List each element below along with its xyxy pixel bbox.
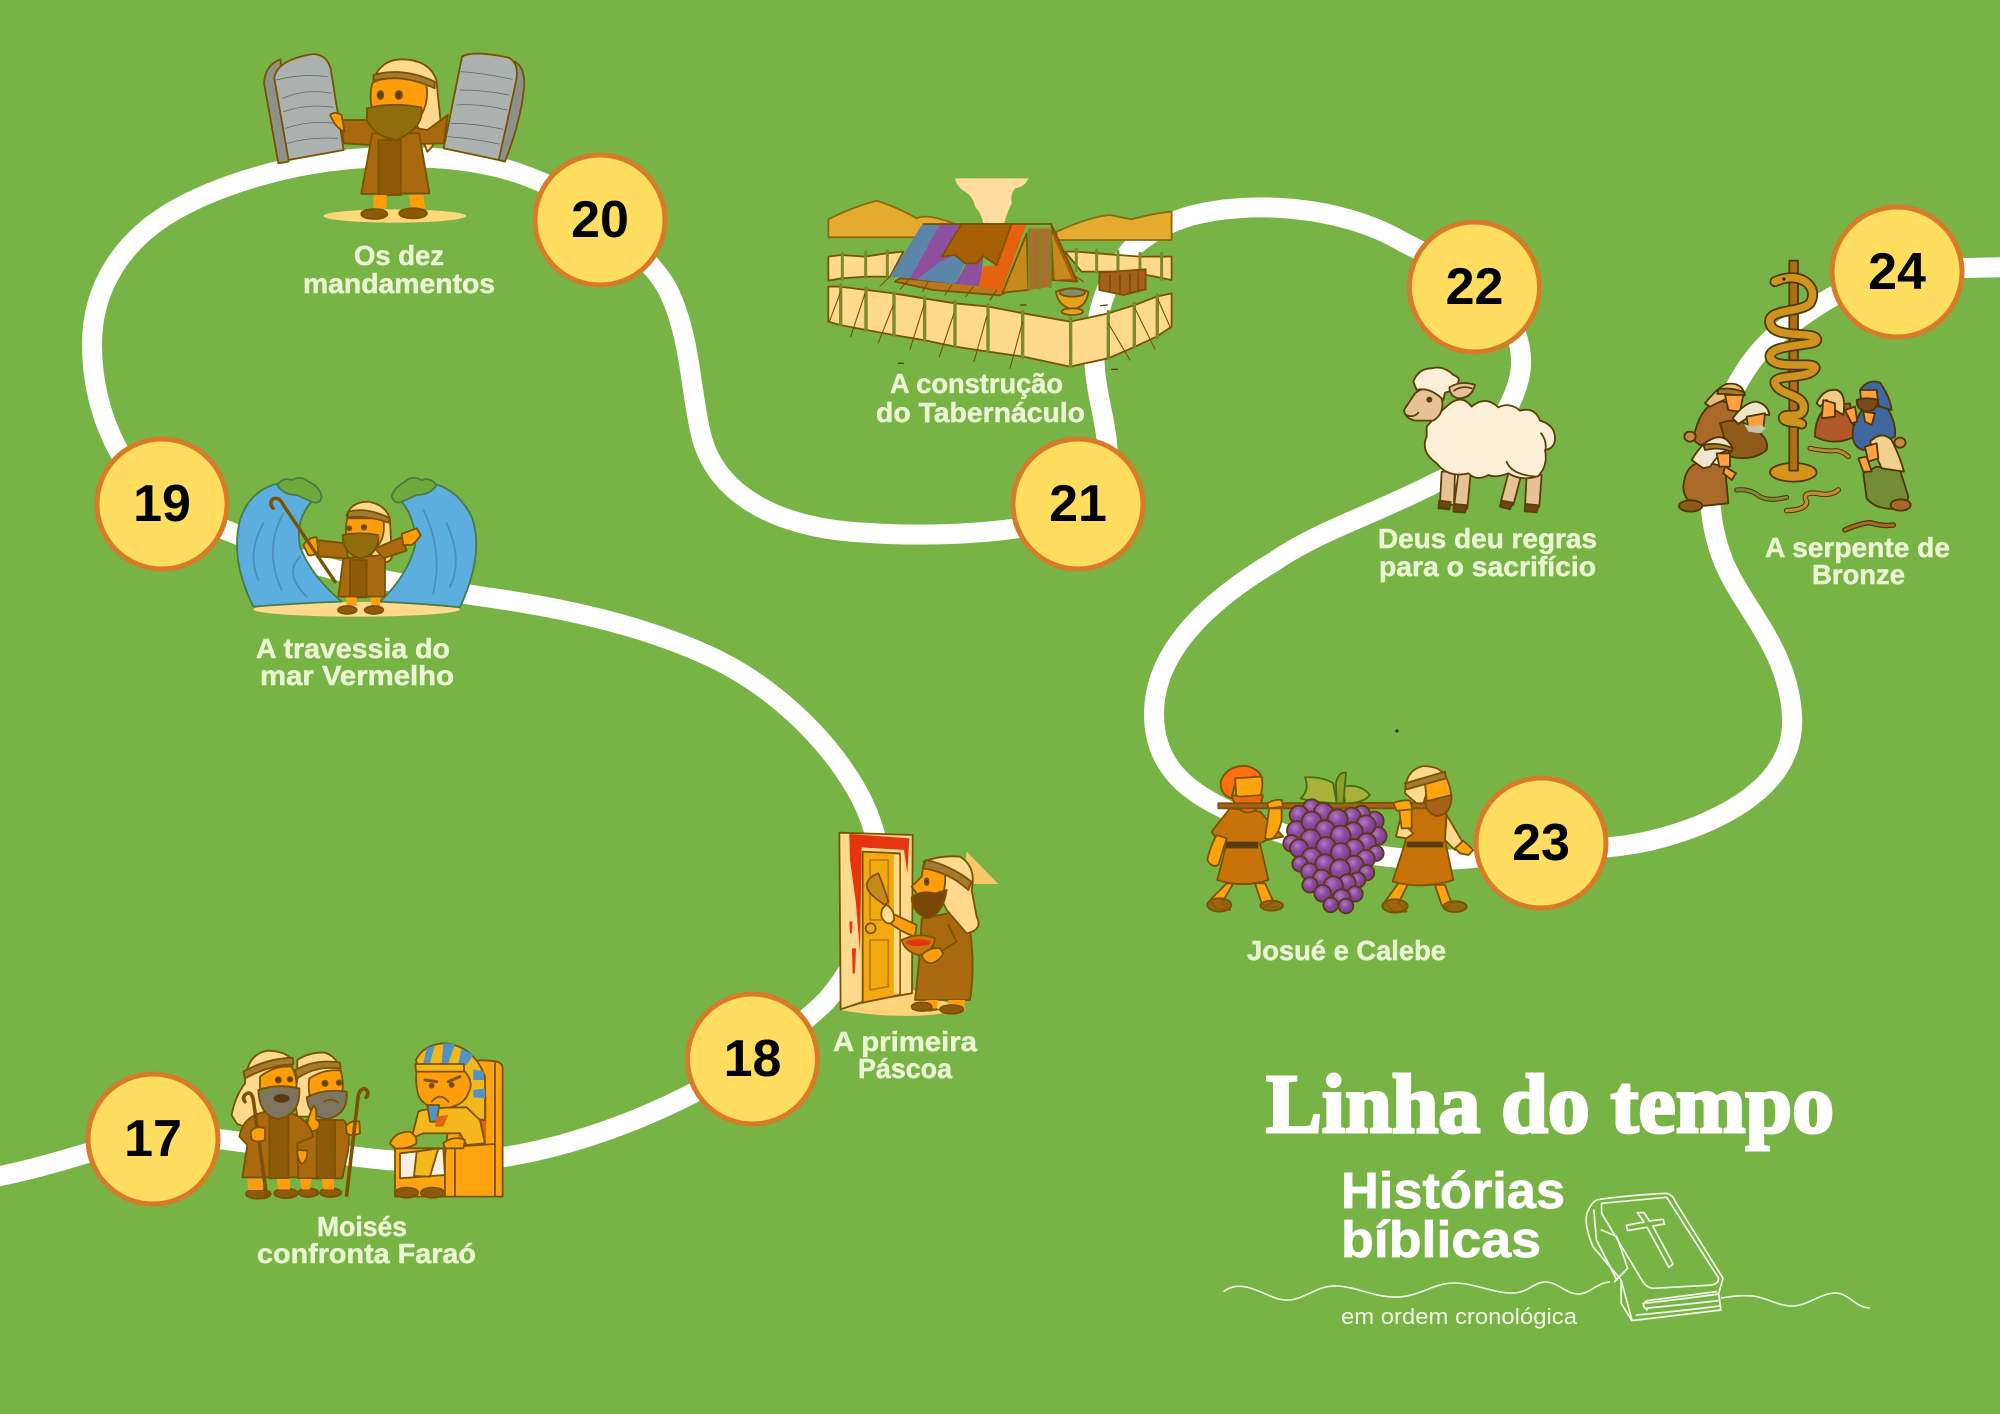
illustration: tabernacle and courtyard xyxy=(828,178,1172,369)
number 18 badge: 18 xyxy=(724,1030,781,1088)
label: Moisés xyxy=(317,1211,407,1242)
label: para o sacrifício xyxy=(1379,551,1596,582)
number 22 badge xyxy=(1410,222,1540,352)
caption: em ordem cronológica: em ordem cronológica xyxy=(1341,1304,1578,1329)
label: Os dez xyxy=(354,240,444,271)
number 20 badge: 20 xyxy=(571,191,629,249)
illustration: bronze serpent with praying people xyxy=(1679,261,1911,530)
number 21 badge xyxy=(1013,439,1143,569)
number 18 badge xyxy=(688,994,818,1124)
illustration: Moses parting the sea xyxy=(237,478,476,617)
scene: Deus deu regras para o sacrifício xyxy=(1378,222,1597,582)
number 20 badge xyxy=(535,155,665,285)
illustration: man marking the door with blood xyxy=(839,833,998,1016)
label: Páscoa xyxy=(858,1053,952,1084)
number 23 badge: 23 xyxy=(1512,814,1570,872)
title: Linha do tempo: Linha do tempo xyxy=(1266,1058,1834,1151)
label: mandamentos xyxy=(303,268,495,299)
label: Josué e Calebe xyxy=(1247,935,1446,966)
illustration: spies carrying the grapes xyxy=(1207,766,1473,913)
label: Deus deu regras xyxy=(1378,523,1597,554)
wavy line xyxy=(1224,1282,1870,1308)
number 24 badge: 24 xyxy=(1868,243,1926,301)
number 17 badge xyxy=(88,1074,218,1204)
number 23 badge xyxy=(1476,778,1606,908)
label: A construção xyxy=(890,368,1063,399)
scene: A travessia do mar Vermelho xyxy=(97,439,476,691)
label: Bronze xyxy=(1812,559,1905,590)
number 24 badge xyxy=(1832,207,1962,337)
illustration: lamb xyxy=(1404,367,1555,513)
icon: Bible line drawing xyxy=(1586,1193,1723,1321)
scene: Josué e Calebe xyxy=(1207,729,1606,966)
scene: Os dez mandamentos xyxy=(264,54,665,299)
subtitle: Histórias bíblicas: Histórias xyxy=(1341,1162,1565,1219)
label: do Tabernáculo xyxy=(876,397,1085,428)
scene: Moisés confronta Faraó xyxy=(88,1043,503,1269)
scene: A serpente de Bronze xyxy=(1679,207,1962,590)
small dot xyxy=(1395,729,1399,733)
number 19 badge: 19 xyxy=(133,475,191,533)
title block xyxy=(1224,1058,1870,1329)
illustration: Moses, Aaron and Pharaoh xyxy=(232,1043,503,1199)
label: A travessia do xyxy=(256,633,450,664)
scene: A primeira Páscoa xyxy=(688,833,998,1124)
number 22 badge: 22 xyxy=(1446,258,1503,316)
winding timeline path xyxy=(0,157,2000,1178)
label: A primeira xyxy=(833,1026,977,1057)
scene: A construção do Tabernáculo xyxy=(828,178,1172,569)
number 17 badge: 17 xyxy=(124,1110,182,1168)
number 21 badge: 21 xyxy=(1049,475,1107,533)
subtitle: Histórias bíblicas: bíblicas xyxy=(1341,1211,1541,1268)
illustration: Moses with the stone tablets xyxy=(264,54,524,223)
label: A serpente de xyxy=(1765,532,1950,563)
label: confronta Faraó xyxy=(257,1238,476,1269)
label: mar Vermelho xyxy=(260,660,454,691)
number 19 badge xyxy=(97,439,227,569)
